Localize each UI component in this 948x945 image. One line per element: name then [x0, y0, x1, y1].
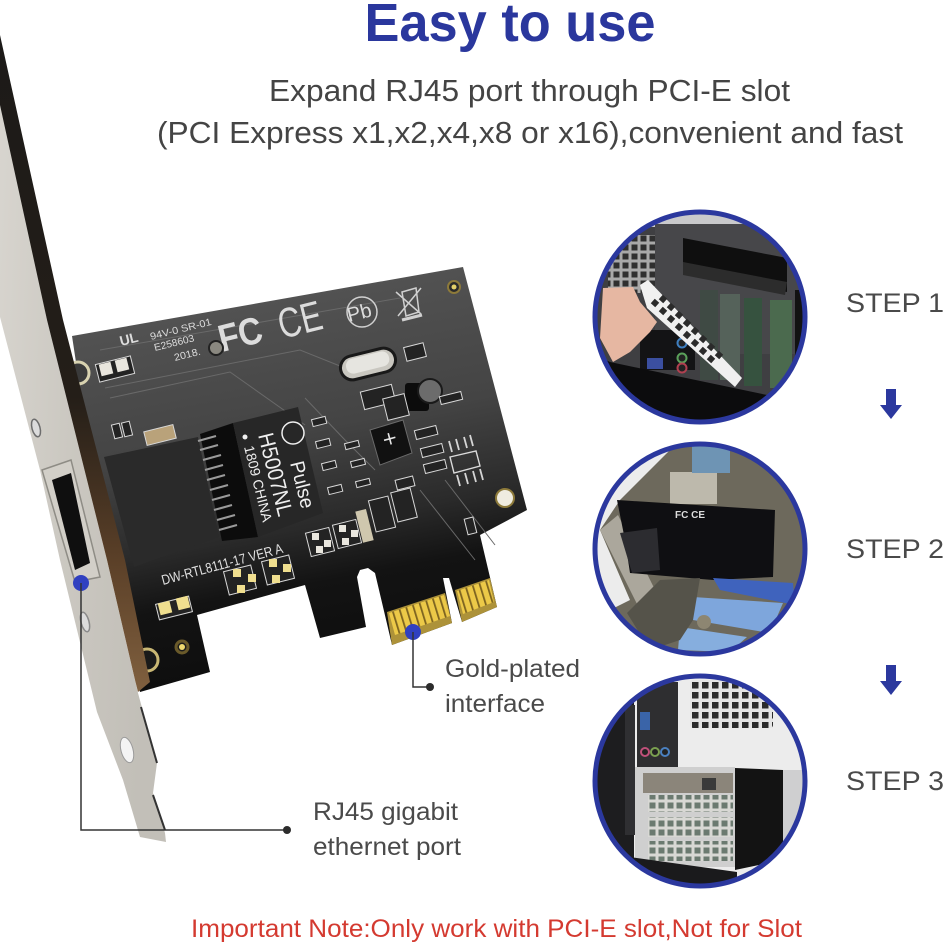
recycling mark [396, 288, 422, 320]
step 1 label: STEP 1 [846, 288, 944, 318]
transformer: 1809 CHINA [241, 444, 276, 524]
logos: 2018. [173, 347, 202, 364]
arrow: step 2 to step 3 [880, 665, 902, 695]
small ic [450, 451, 480, 473]
step 2 photo [590, 440, 810, 665]
callout: RJ45 gigabit ethernet port: RJ45 gigabit [313, 798, 458, 826]
crystal [338, 346, 398, 382]
board label: DW-RTL8111-17 VER A [160, 540, 285, 588]
logos: FC [214, 309, 267, 361]
metal bracket [0, 35, 166, 842]
logos [118, 291, 374, 364]
subtitle: Expand RJ45 port through PCI-E slot [269, 73, 790, 108]
mounting holes [448, 281, 460, 293]
logos: Pb [345, 300, 374, 327]
subtitle: (PCI Express x1,x2,x4,x8 or x16),convenient and fast [157, 115, 903, 150]
logos: CE [273, 291, 327, 348]
step 2 label: STEP 2 [846, 534, 944, 564]
logos: 94V-0 SR-01 [149, 317, 213, 343]
logos: UL [118, 329, 140, 349]
callout: gold-plated interface: interface [445, 690, 545, 718]
callout dot: port [73, 575, 89, 591]
white solder pads [99, 358, 374, 615]
washers [67, 362, 89, 384]
transformer: Pulse [285, 459, 318, 511]
circuit board [67, 267, 527, 692]
inductor [405, 383, 429, 411]
callout: RJ45 gigabit ethernet port: ethernet port [313, 833, 461, 861]
callout: gold-plated interface [413, 632, 580, 718]
callout: RJ45 gigabit ethernet port [81, 583, 461, 861]
step 1 photo [590, 205, 810, 430]
RJ45 port [42, 460, 100, 582]
circuit board: ✕ [379, 429, 399, 451]
gold fingers [387, 593, 452, 645]
step 3 photo [590, 670, 810, 895]
step 3 label: STEP 3 [846, 766, 944, 796]
pins [200, 423, 258, 541]
step 2 photo: FC CE [675, 510, 705, 521]
dark shielding block [104, 437, 219, 567]
transformer: H5007NL [253, 430, 298, 519]
product photo: network card [0, 35, 527, 842]
callout: gold-plated interface: Gold-plated [445, 655, 580, 683]
capacitors and pads [95, 343, 477, 620]
chip [370, 420, 412, 465]
callout dot: fingers [405, 624, 421, 640]
logos: E258603 [153, 333, 196, 354]
important note: Important Note:Only work with PCI-E slot,Not for Slot [191, 915, 802, 943]
subtitle [157, 73, 903, 150]
transformer [233, 407, 323, 537]
arrow: step 1 to step 2 [880, 389, 902, 419]
traces [100, 298, 495, 560]
